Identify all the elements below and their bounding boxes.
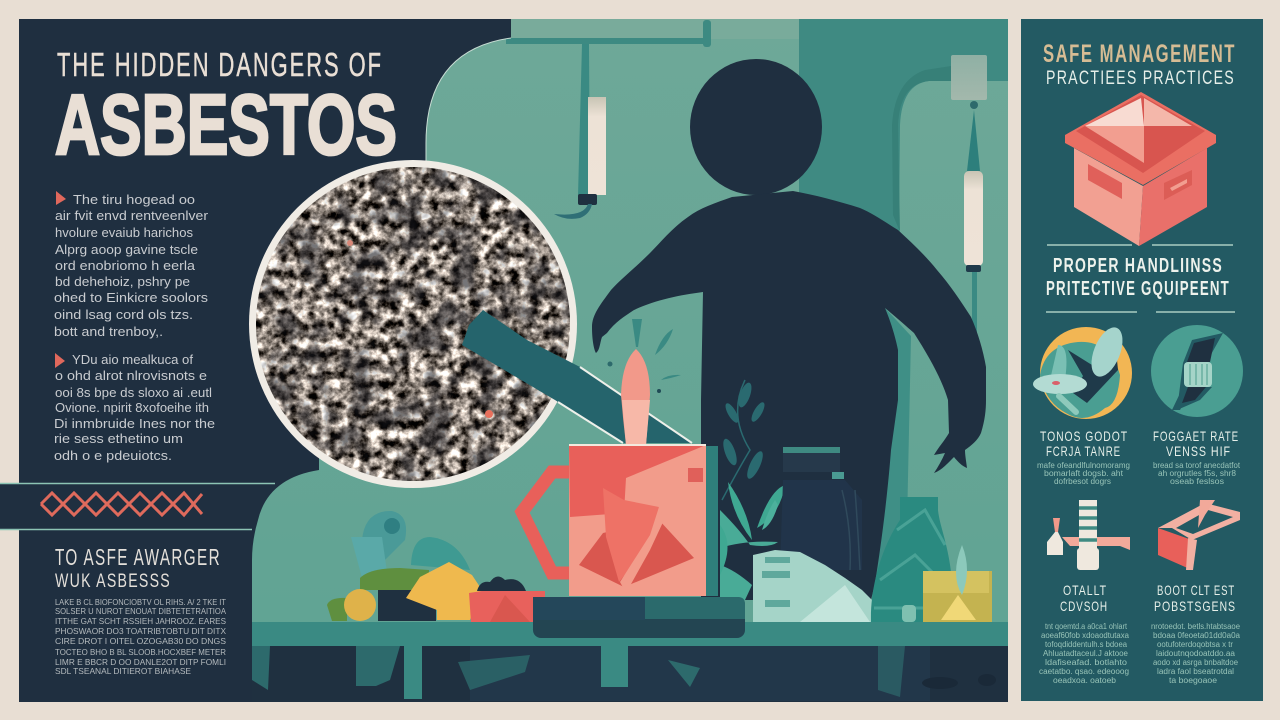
caption: tools: FCRJA TANRE — [1046, 443, 1121, 459]
panel: left navy column — [0, 19, 511, 702]
mint figurine — [753, 550, 894, 622]
yellow heap — [406, 562, 482, 620]
caption: tools: bomarlaft dogsb. aht — [1044, 469, 1124, 478]
caption: column: tnt qoemtd.a a0ca1 ohlart — [1045, 622, 1128, 631]
heading dividers — [1046, 245, 1235, 312]
dark cylinder — [378, 590, 436, 621]
torn paper on mug — [579, 488, 694, 593]
awareness fine print: SDL TSEANAL DITIEROT BIAHASE — [55, 666, 191, 676]
caption: gloves: FOGGAET RATE — [1153, 428, 1239, 444]
title: THE HIDDEN DANGERS OF — [57, 46, 383, 83]
teal mound — [411, 537, 470, 570]
blade pointer — [462, 310, 692, 443]
second paragraph — [54, 352, 215, 463]
caption: tools: mafe ofeandlfulnomoramg — [1037, 461, 1130, 470]
caption: tray: ta boegoaoe — [1169, 676, 1218, 685]
second paragraph: Ovione. npirit 8xofoeihe ith — [55, 400, 209, 415]
silhouette figure — [592, 59, 986, 600]
shelf — [252, 622, 1008, 646]
second paragraph: rie sess ethetino um — [54, 431, 183, 446]
second paragraph: Di inmbruide Ines nor the — [54, 416, 215, 431]
dark teal wall section — [799, 19, 1008, 232]
first paragraph: ohed to Einkicre soolors — [54, 290, 209, 305]
icon: sealed disposal column — [1047, 500, 1130, 570]
caption: tray: ladra faol bseatrotdal — [1157, 667, 1234, 676]
first paragraph: The tiru hogead oo — [73, 192, 195, 207]
caption: gloves: bread sa torof anecdatfot — [1153, 461, 1241, 470]
green wedge — [360, 568, 429, 590]
caption: column — [1039, 582, 1130, 685]
awareness subheading: TO ASFE AWARGER — [55, 544, 221, 570]
caption: column: aoeaf60fob xdoaodtutaxa — [1041, 631, 1130, 640]
caption: column: tofoqdiddentulh.s bdoea — [1045, 640, 1128, 649]
magnifying circle with asbestos texture — [249, 160, 577, 488]
body and arms — [592, 191, 986, 600]
foliage behind mug — [720, 380, 785, 600]
hanging cream tool — [554, 44, 606, 219]
first paragraph: oind lsag cord ols tzs. — [54, 307, 193, 322]
awareness subheading — [55, 544, 221, 592]
caption: tray: BOOT CLT EST — [1157, 582, 1235, 598]
dark blob — [477, 576, 526, 591]
yellow box with flame — [923, 545, 992, 622]
yellow disc — [344, 589, 376, 621]
icon: respirator mask — [1033, 323, 1132, 419]
first paragraph: Alprg aoop gavine tscle — [55, 242, 198, 257]
caption: tray: bdoaa 0feoeta01dd0a0a — [1153, 631, 1241, 640]
title: ASBESTOS — [55, 78, 397, 173]
mug base — [533, 597, 745, 638]
caption: column: ldafiseafad. botlahto — [1045, 658, 1128, 667]
second paragraph: odh o e pdeuiotcs. — [54, 448, 172, 463]
patterned vase — [871, 497, 953, 622]
shelf objects on the left — [327, 511, 545, 622]
carrot shaped brush — [608, 319, 681, 445]
caption: column: caetatbo. qsao. edeooog — [1039, 667, 1129, 676]
caption: tray: POBSTSGENS — [1154, 598, 1236, 614]
second paragraph: YDu aio mealkuca of — [72, 352, 193, 367]
coral box — [469, 591, 545, 622]
proper handling heading — [1046, 255, 1230, 300]
caption: gloves: VENSS HIF — [1166, 443, 1231, 459]
caption: column: oeadxoa. oatoeb — [1053, 676, 1117, 685]
first paragraph: bd dehehoiz, pshry pe — [55, 274, 190, 289]
caption: gloves — [1153, 428, 1241, 486]
first paragraph: ord enobriomo h eerla — [55, 258, 196, 273]
hanging pipe — [506, 20, 711, 47]
caption: tray: nrotoedot. betls.htabtsaoe — [1151, 622, 1241, 631]
icon: asbestos containment box — [1065, 92, 1216, 246]
caption: tray: aodo xd asrga bnbaltdoe — [1153, 658, 1239, 667]
upper wall strip — [511, 19, 799, 39]
caption: tools: dofrbesot dogrs — [1054, 477, 1111, 486]
panel: safe management column — [1021, 19, 1263, 701]
mug — [522, 444, 718, 596]
title — [55, 46, 397, 173]
caption: column: Ahluatadtaceul.J aktooe — [1043, 649, 1129, 658]
awareness fine print: LAKE B CL BIOFONCIOBTV OL RIHS. A/ 2 TKE IT — [55, 597, 226, 607]
teal wedge behind figure — [871, 308, 911, 620]
caption: gloves: ah orgrutles f5s, shr8 — [1158, 469, 1237, 478]
caption: tray: ootufoterdoqobtsa x tr — [1157, 640, 1233, 649]
back wall — [252, 19, 1008, 702]
caption: tray — [1151, 582, 1241, 685]
awareness fine print: SOLSER U NUROT ENOUAT DIBTETETRAITIOA — [55, 606, 226, 616]
dark bottle — [780, 447, 862, 570]
panel: central illustration scene — [252, 19, 1008, 702]
icon: protective gloves — [1151, 325, 1243, 417]
awareness fine print: LIMR E BBCR D OO DANLE2OT DITP FOMLI — [55, 657, 226, 667]
under shelf debris — [252, 646, 1008, 702]
first paragraph — [54, 191, 209, 339]
first paragraph: hvolure evaiub harichos — [55, 225, 193, 240]
awareness fine print: ITTHE GAT SCHT RSSIEH JAHROOZ. EARES — [55, 616, 226, 626]
wall mounted brush — [951, 55, 987, 340]
awareness fine print — [55, 597, 226, 676]
second paragraph: o ohd alrot nlrovisnots e — [55, 368, 207, 383]
first paragraph: bott and trenboy,. — [54, 324, 163, 339]
caption: gloves: oseab feslsos — [1170, 477, 1224, 486]
small knob — [902, 605, 916, 622]
caption: tools: TONOS GODOT — [1040, 428, 1128, 444]
head — [690, 59, 822, 195]
left green piece — [327, 598, 347, 621]
icon: coral disposal tray — [1158, 500, 1240, 570]
diamond pattern band — [0, 484, 275, 530]
awareness fine print: CIRE DROT I OITEL OZOGAB30 DO DNGS — [55, 636, 226, 646]
caption: column: CDVSOH — [1060, 598, 1108, 614]
caption: column: OTALLT — [1063, 582, 1107, 598]
second paragraph: ooi 8s bpe ds sloxo ai .eutl — [55, 385, 212, 400]
panel heading — [1043, 40, 1236, 89]
awareness fine print: PHOSWAOR DO3 TOATRIBTOBTU DIT DITX — [55, 626, 226, 636]
caption: tools — [1037, 428, 1130, 486]
caption: tray: laidoutnqodoatddo.aa — [1156, 649, 1236, 658]
teal pipe ornament — [362, 511, 406, 560]
awareness subheading: WUK ASBESSS — [55, 571, 171, 592]
first paragraph: air fvit envd rentveenlver — [55, 208, 209, 223]
awareness fine print: TOCTEO BHO B BL SLOOB.HOCXBEF METER — [55, 647, 226, 657]
curved wall pipe — [892, 66, 951, 232]
